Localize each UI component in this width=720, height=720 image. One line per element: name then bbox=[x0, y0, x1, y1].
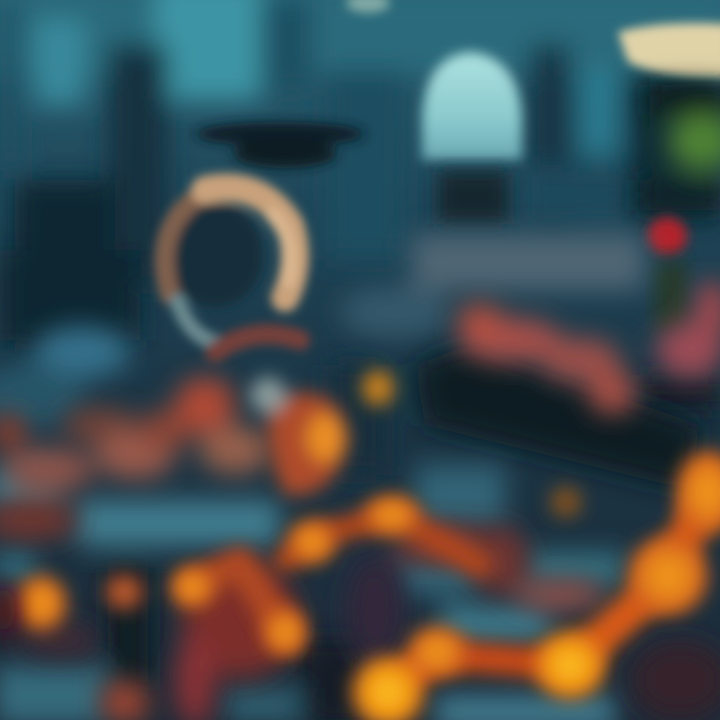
lower teal panels bbox=[0, 465, 625, 720]
ring: tan hoop bbox=[165, 188, 300, 352]
lamp: cream shape top right bbox=[346, 0, 720, 78]
orange blob centre bbox=[250, 370, 394, 495]
dark beam bbox=[330, 345, 700, 490]
left edge dark red vignette bbox=[0, 582, 720, 720]
mid panel: grey slab right bbox=[0, 234, 720, 427]
signal post bbox=[655, 262, 687, 332]
icon: red signal bbox=[647, 217, 687, 255]
dark hat shape bbox=[195, 122, 365, 168]
chart markers: glowing orange points bbox=[15, 450, 720, 720]
mottled red-brown texture bbox=[0, 280, 720, 720]
skyline: teal haze and dark towers bbox=[0, 0, 720, 350]
line chart: lower orange series bbox=[195, 490, 710, 680]
dome: pale teal bbox=[422, 52, 522, 160]
dome base bbox=[438, 172, 508, 224]
green glow bbox=[640, 85, 720, 210]
